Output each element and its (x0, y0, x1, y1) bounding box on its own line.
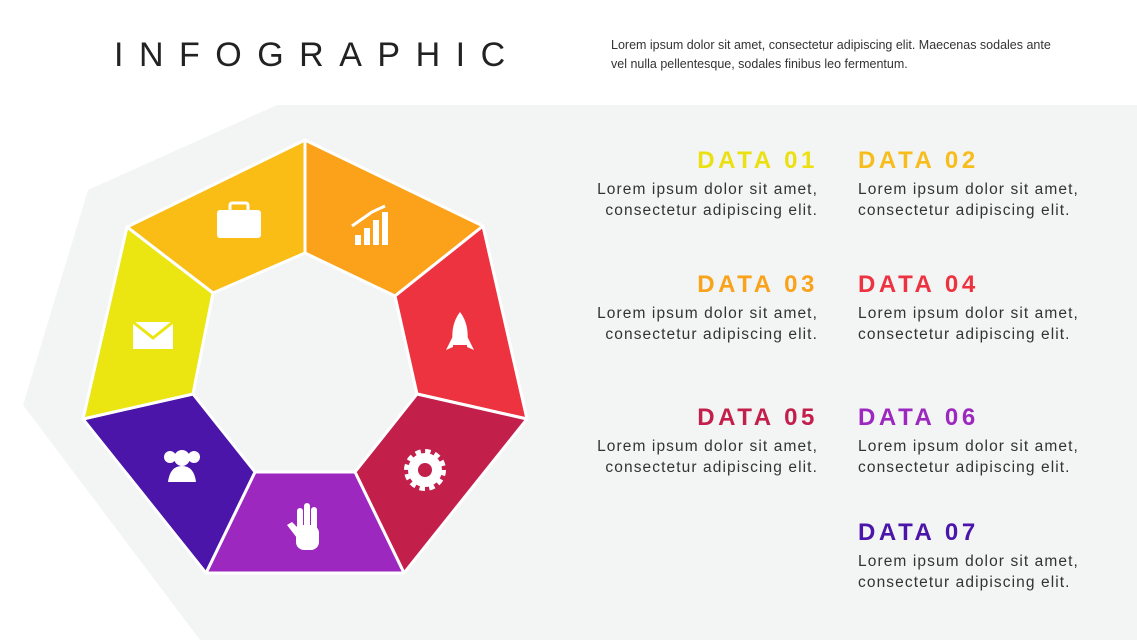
data 01: consectetur adipiscing elit. (605, 202, 818, 219)
heptagon chart (82, 138, 528, 574)
data 07: DATA 07 (858, 519, 979, 546)
data 04: Lorem ipsum dolor sit amet, (858, 305, 1079, 322)
icon: gear (408, 453, 442, 487)
data 03 (597, 271, 818, 343)
data 04: DATA 04 (858, 271, 979, 298)
icon: people (164, 450, 200, 482)
header text: Lorem ipsum dolor sit amet, consectetur adipiscing elit. Maecenas sodales ante vel nulla pellentesque, sodales finibus leo fermentum. (611, 38, 1051, 71)
data 03: consectetur adipiscing elit. (605, 326, 818, 343)
icon: briefcase (217, 203, 261, 238)
segment 5 purple (206, 472, 404, 573)
title: INFOGRAPHIC (114, 36, 521, 74)
data 07 (858, 519, 1079, 591)
data 03: DATA 03 (697, 271, 818, 298)
data 01: Lorem ipsum dolor sit amet, (597, 181, 818, 198)
icon: envelope (133, 322, 173, 349)
data 02: DATA 02 (858, 147, 979, 174)
data 01 (597, 147, 818, 219)
data 06: consectetur adipiscing elit. (858, 459, 1071, 476)
data 05 (597, 404, 818, 476)
data 02: consectetur adipiscing elit. (858, 202, 1071, 219)
data 05: DATA 05 (697, 404, 818, 431)
data 06: DATA 06 (858, 404, 979, 431)
icon: chart (352, 206, 388, 245)
data 07: consectetur adipiscing elit. (858, 574, 1071, 591)
icon: rocket (446, 312, 474, 350)
segment 4 crimson (355, 394, 527, 573)
data 07: Lorem ipsum dolor sit amet, (858, 553, 1079, 570)
data 04 (858, 271, 1079, 343)
data 06 (858, 404, 1079, 476)
segment 6 indigo (83, 394, 255, 573)
segment 2 orange (305, 140, 483, 296)
icon: hand (287, 503, 319, 550)
segment 3 red (395, 226, 527, 419)
data 04: consectetur adipiscing elit. (858, 326, 1071, 343)
data 01: DATA 01 (697, 147, 818, 174)
segment 1 gold (127, 140, 305, 293)
data 02 (858, 147, 1079, 219)
data 06: Lorem ipsum dolor sit amet, (858, 438, 1079, 455)
segment 7 yellow (83, 227, 213, 419)
data 02: Lorem ipsum dolor sit amet, (858, 181, 1079, 198)
data 05: consectetur adipiscing elit. (605, 459, 818, 476)
data 05: Lorem ipsum dolor sit amet, (597, 438, 818, 455)
data 03: Lorem ipsum dolor sit amet, (597, 305, 818, 322)
